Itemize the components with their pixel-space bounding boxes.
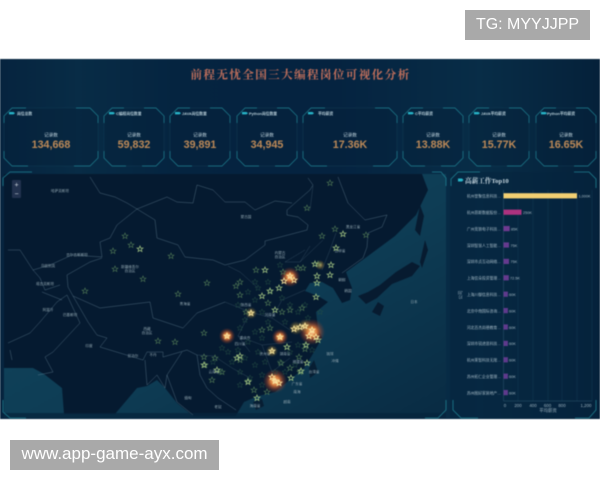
bars: 1,000K xyxy=(578,194,591,198)
watermark: TG tag: TG: MYYJJPP xyxy=(476,16,579,33)
card: Python salary xyxy=(536,108,596,166)
small place labels: 不丹 xyxy=(149,353,157,357)
bars: 河北百杰尚德教育… xyxy=(467,325,501,330)
small place labels: 日本 xyxy=(410,299,418,304)
bars: 60K xyxy=(509,342,516,346)
chart heading: 高薪工作Top10 xyxy=(465,176,509,185)
bars: 北京中炮国际咨询… xyxy=(467,308,501,313)
x axis title: 平均薪资 xyxy=(539,407,557,414)
map zoom control: − xyxy=(14,191,19,198)
small place labels: 云南省 xyxy=(209,369,220,374)
bars: 上海川御信息科技… xyxy=(467,292,501,297)
bars: 深圳市锐途思科技… xyxy=(467,341,501,346)
card: C jobs: C编程岗位数量 xyxy=(116,111,142,116)
axes xyxy=(504,190,592,401)
card: JAVA salary xyxy=(469,108,529,166)
card: JAVA salary: 记录数 xyxy=(492,132,506,138)
small place labels: 四川省 xyxy=(235,341,246,346)
small place labels: 自治区 xyxy=(275,254,286,259)
axis tick labels: 1,200 xyxy=(580,403,592,408)
bars: 60K xyxy=(509,326,516,330)
card: C salary xyxy=(403,108,463,166)
dashboard xyxy=(0,58,600,420)
card: Python jobs: 记录数 xyxy=(260,132,274,138)
card: total jobs: 岗位总数 xyxy=(17,111,32,116)
watermark: TG tag xyxy=(465,10,590,40)
small place labels: 吉尔吉斯斯坦 xyxy=(66,252,88,257)
small place labels: 自治区 xyxy=(125,268,136,273)
small place labels: 广东省 xyxy=(292,381,303,386)
small place labels: 琉球 xyxy=(326,351,334,356)
country and province borders xyxy=(8,177,387,415)
card: average salary: 记录数 xyxy=(343,132,357,138)
small place labels: 湖南省 xyxy=(280,351,291,356)
card: JAVA jobs: 39,891 xyxy=(184,139,216,151)
bars: 杭州誉聚信息科技… xyxy=(467,194,501,198)
small place labels: 缅甸 xyxy=(184,395,192,400)
axis tick labels: 200 xyxy=(514,403,522,408)
small place labels: 巴基斯坦 xyxy=(63,312,78,317)
card: Python jobs: Python岗位数量 xyxy=(249,111,277,116)
card: C jobs xyxy=(104,108,164,166)
card: Python jobs: 34,945 xyxy=(251,139,283,151)
small place labels: 新疆维吾尔 xyxy=(121,264,139,269)
small place labels: 塔吉克斯坦 xyxy=(36,281,54,286)
panel: top salary bar chart xyxy=(450,172,597,418)
card: C salary: 记录数 xyxy=(426,132,440,138)
card: C jobs: 59,832 xyxy=(118,139,150,151)
card: average salary xyxy=(303,108,397,166)
bars: 75K xyxy=(510,260,518,264)
small place labels: 贵州省 xyxy=(260,351,271,356)
card: average salary: 17.36K xyxy=(333,139,368,151)
axis tick labels: 800 xyxy=(558,403,566,408)
small place labels: 内蒙古 xyxy=(275,250,286,255)
map zoom control: + xyxy=(14,182,19,189)
card: total jobs: 记录数 xyxy=(44,132,58,138)
bottom edge shade xyxy=(4,413,446,418)
card: JAVA jobs xyxy=(170,108,230,166)
watermark: site URL xyxy=(10,440,219,470)
small place labels: 阿富汗 xyxy=(43,307,54,312)
bars: 60K xyxy=(509,359,516,363)
bars: 72.5K xyxy=(510,277,520,281)
panel: China map xyxy=(3,172,446,418)
card: C jobs: 记录数 xyxy=(127,132,141,138)
small place labels: 海南省 xyxy=(250,403,261,408)
small place labels: 南海 xyxy=(293,389,301,394)
small place labels: 吉林省 xyxy=(335,248,346,253)
bars: 杭州莱智科技无限… xyxy=(467,358,501,363)
bars: 250K xyxy=(523,211,532,215)
small place labels: 蒙古国 xyxy=(241,214,252,219)
small place labels: 印度 xyxy=(85,343,93,348)
bars: 上海信朵投资管理… xyxy=(467,276,501,281)
small place labels: 陕西省 xyxy=(241,302,252,307)
bars: 60K xyxy=(509,309,516,313)
heat glows xyxy=(219,260,325,393)
bars: 广州竞狼电子科技… xyxy=(467,226,501,231)
bars: 60K xyxy=(509,391,516,395)
small place labels: 尼泊尔 xyxy=(128,353,139,358)
small place labels: 黑龙江省 xyxy=(346,224,361,229)
watermark: site URL: www.app-game-ayx.com xyxy=(21,444,208,463)
small place labels: 福建省 xyxy=(293,359,304,364)
small place labels: 重庆市 xyxy=(240,335,251,340)
bars: 苏州拓仁企业管理… xyxy=(467,374,501,379)
bars: 杭州昂斯数据股份… xyxy=(467,210,501,215)
bars: 深圳智慧人工智能… xyxy=(467,243,501,248)
small place labels: 冲绳 xyxy=(331,358,339,363)
card: Python jobs xyxy=(237,108,297,166)
card: Python salary: 记录数 xyxy=(559,132,573,138)
bars: 60K xyxy=(509,375,516,379)
small place labels: 台湾省 xyxy=(309,369,320,374)
bars: 60K xyxy=(509,293,516,297)
small place labels: 越南 xyxy=(283,399,291,404)
small place labels: 朝鲜 xyxy=(338,277,346,282)
card: total jobs xyxy=(4,108,98,166)
bars xyxy=(467,193,591,395)
bars: 苏州图好家装地产… xyxy=(467,390,501,395)
islands: Japan and Sakhalin xyxy=(358,205,428,316)
small place labels: 韩国 xyxy=(344,288,352,293)
card: Python salary: 16.65K xyxy=(549,139,584,151)
bars: 深圳市贞互动网络… xyxy=(467,259,501,264)
card: C salary: C平均薪资 xyxy=(415,111,433,116)
card: average salary: 平均薪资 xyxy=(318,111,333,116)
card: total jobs: 134,668 xyxy=(32,139,70,151)
land mass xyxy=(4,174,428,416)
small place labels: 哈萨克斯坦 xyxy=(51,188,69,193)
card: JAVA salary: JAVA平均薪资 xyxy=(481,111,506,116)
KPI card row xyxy=(4,108,596,166)
chart heading xyxy=(458,176,509,185)
small place labels: 乌兹别克 xyxy=(41,263,56,268)
grid lines xyxy=(518,190,592,401)
small place labels: 自治区 xyxy=(142,330,153,335)
bars: 85K xyxy=(511,227,518,231)
card: JAVA jobs: JAVA岗位数量 xyxy=(182,111,207,116)
title: 前程无忧全国三大编程岗位可视化分析 xyxy=(190,68,411,82)
map frame xyxy=(3,172,446,418)
axis tick labels: 0 xyxy=(504,403,507,408)
small place labels: 青海省 xyxy=(180,301,191,306)
axis tick labels: 600 xyxy=(544,403,552,408)
y axis title: 公司 xyxy=(458,291,463,299)
small place labels xyxy=(36,188,418,409)
island: Hainan and Taiwan xyxy=(253,360,318,410)
small place labels: 河南省 xyxy=(265,312,276,317)
card: Python salary: Python平均薪资 xyxy=(547,111,575,116)
city stars xyxy=(82,180,369,400)
bars: 75K xyxy=(510,244,518,248)
map zoom control xyxy=(12,180,21,198)
small place labels: 西藏 xyxy=(143,326,151,331)
card: JAVA salary: 15.77K xyxy=(482,139,517,151)
small place labels: 老挝 xyxy=(214,404,222,409)
axis tick labels xyxy=(504,403,592,408)
card: C salary: 13.88K xyxy=(416,139,451,151)
axis tick labels: 400 xyxy=(529,403,537,408)
card: JAVA jobs: 记录数 xyxy=(193,132,207,138)
